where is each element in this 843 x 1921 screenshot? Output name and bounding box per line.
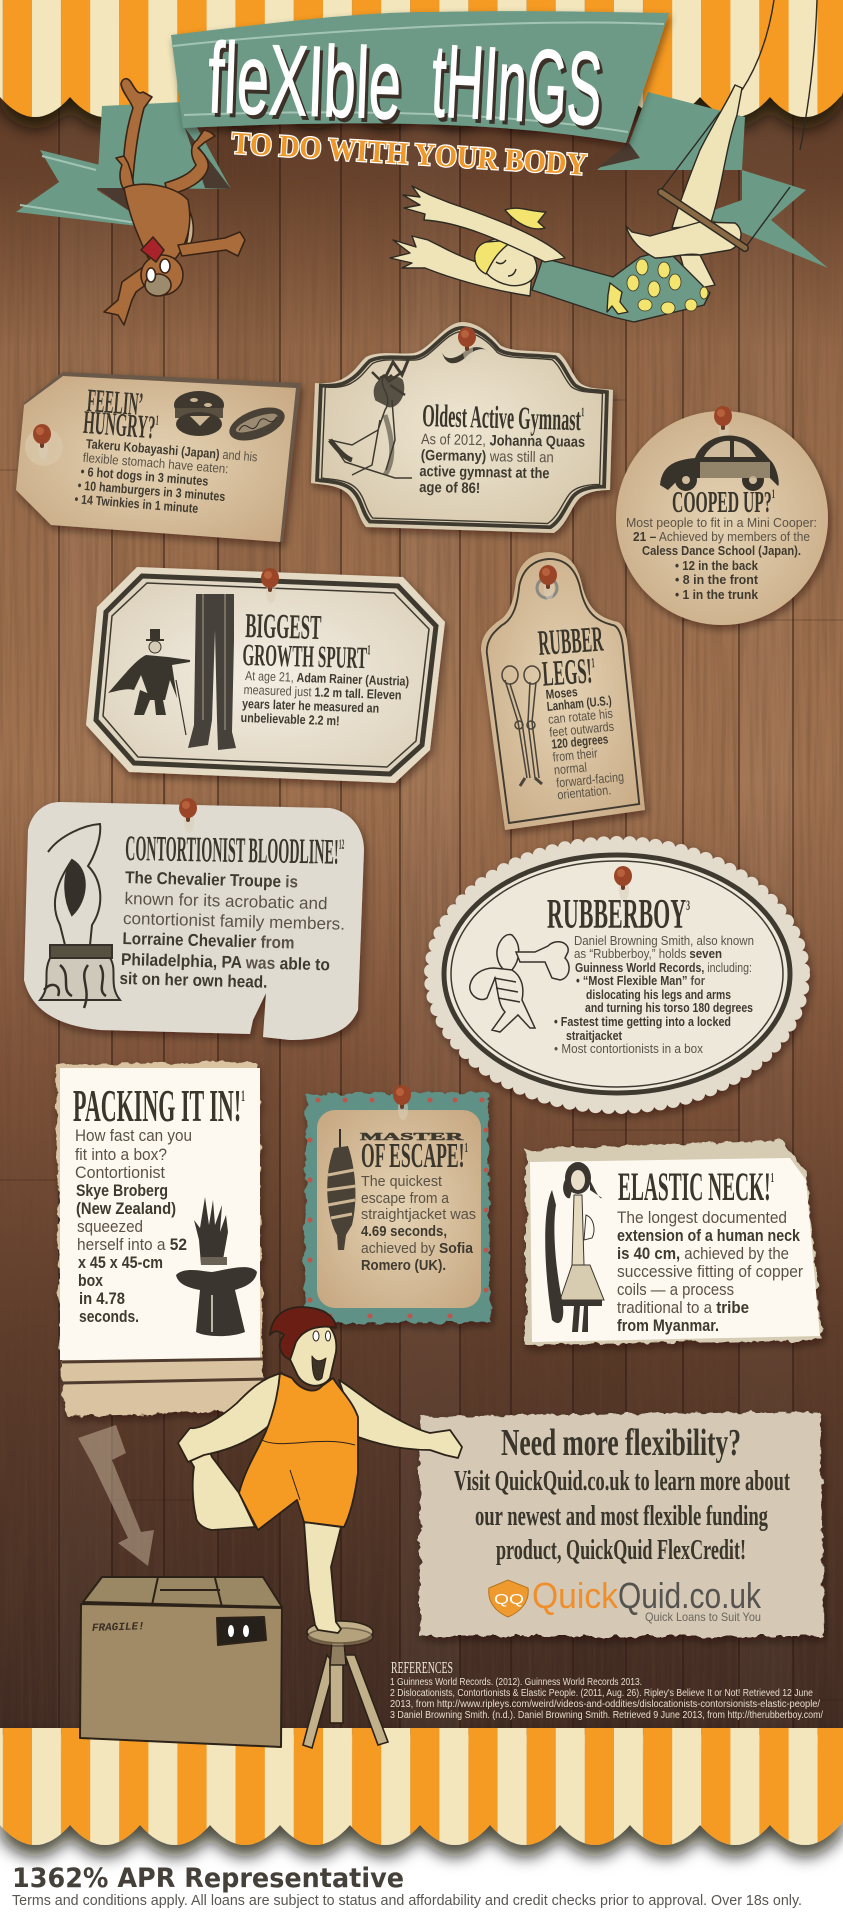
body: escape: The quickest: [361, 1173, 443, 1190]
references: [390, 1658, 823, 1721]
body: cta text: [454, 1465, 790, 1566]
body: contortionist: known for its acrobatic and: [124, 889, 328, 913]
body: hungry: • 6 hot dogs in 3 minutes: [80, 464, 209, 489]
body: growth: [240, 668, 409, 731]
body: contortionist: contortionist family members.: [123, 909, 345, 934]
footer APR heading: 1362% APR Representative: [12, 1863, 404, 1894]
logo: QuickQuid: QQ: [494, 1591, 524, 1608]
illustration: trapeze acrobat: [390, 0, 817, 322]
bottom striped awning: [0, 1728, 843, 1845]
body: packing: x 45 x 45-cm: [78, 1253, 163, 1272]
heading: master of escape: [360, 1131, 468, 1175]
body: gymnast: active gymnast at the: [419, 463, 550, 482]
body: contortionist: [119, 868, 346, 994]
body: packing: in 4.78: [79, 1289, 125, 1308]
heading: feelin' hungry: 1: [155, 414, 159, 429]
body: rubberboy: • Most contortionists in a box: [554, 1041, 703, 1056]
title text: fleXIble: [206, 22, 403, 141]
panel: rubber legs tag: [481, 552, 645, 830]
pin: growth: [261, 568, 279, 603]
panel: feelin' hungry tag: [16, 372, 301, 542]
heading: rubberboy: 3: [686, 898, 690, 914]
pin: gymnast: [458, 327, 476, 362]
heading: growth: [242, 606, 372, 675]
reference list: 1 Guinness World Records. (2012). Guinness World Records 2013.: [390, 1677, 642, 1688]
body: escape: 4.69 seconds,: [361, 1223, 447, 1240]
body: growth: years later he measured an: [242, 696, 379, 716]
pin: rubber legs: [539, 565, 557, 600]
icon: metal ring: [537, 578, 557, 598]
illustration: contortionist statue: [40, 824, 120, 1008]
body: packing: [75, 1126, 192, 1326]
body: escape: [361, 1173, 476, 1274]
body: rubber legs: can rotate his: [547, 706, 614, 727]
body: escape: straightjacket was: [361, 1206, 476, 1223]
heading: rubberboy: RUBBERBOY: [547, 892, 813, 938]
body: packing: herself into a 52: [77, 1235, 187, 1254]
references heading: REFERENCES: [391, 1658, 453, 1677]
body: cooped up: 21 – Achieved by members of the: [633, 529, 810, 544]
illustration: cardboard box: [80, 1577, 282, 1747]
body: elastic neck: extension of a human neck: [617, 1226, 800, 1245]
body: escape: escape from a: [361, 1190, 450, 1207]
heading: growth: GROWTH SPURT: [242, 637, 498, 679]
body: rubber legs: normal: [553, 759, 588, 778]
body: contortionist: sit on her own head.: [119, 969, 268, 992]
illustration: magician hat and hand: [176, 1197, 257, 1336]
reference list: 2013, from http://www.ripleys.com/weird/videos-and-oddities/dislocationists-contorsionists-elastic-people/: [390, 1699, 820, 1710]
heading: gymnast: 1: [581, 404, 585, 419]
body: gymnast: age of 86!: [419, 479, 480, 497]
body: cooped up: • 12 in the back: [675, 558, 759, 573]
ornament: swirl: [442, 347, 488, 363]
body: cooped up: • 8 in the front: [675, 572, 759, 587]
body: gymnast: As of 2012, Johanna Quaas: [421, 431, 585, 451]
body: rubberboy: • “Most Flexible Man” for: [576, 973, 705, 988]
body: contortionist: Philadelphia, PA was able to: [121, 950, 330, 974]
illustration: long-necked woman: [545, 1162, 604, 1332]
body: gymnast: [419, 431, 585, 499]
body: packing: How fast can you: [75, 1126, 192, 1145]
body: elastic neck: is 40 cm, achieved by the: [617, 1244, 789, 1263]
body: escape: Romero (UK).: [361, 1257, 446, 1274]
icon: car: [660, 436, 779, 491]
body: growth: At age 21, Adam Rainer (Austria): [245, 668, 409, 689]
heading: master of escape: 1: [464, 1141, 468, 1156]
illustration: stretching woman: [178, 1307, 462, 1633]
heading: cooped up: 1: [772, 486, 775, 501]
panel: biggest growth spurt: [86, 567, 445, 783]
arrow: translucent double arrow: [78, 1425, 154, 1566]
pin: rubberboy: [614, 866, 632, 901]
pin: escape: [393, 1085, 411, 1120]
illustration: straitjacket figure: [327, 1129, 356, 1250]
body: cooped up: Caless Dance School (Japan).: [642, 543, 801, 558]
body: rubberboy: Guinness World Records, including:: [575, 960, 752, 975]
panel: contortionist bloodline: [24, 798, 364, 1040]
heading: rubber legs: LEGS!: [541, 646, 651, 694]
illustration: stool: [303, 1621, 388, 1748]
panel: cooped up circle: [616, 406, 828, 625]
body: packing: fit into a box?: [75, 1145, 167, 1164]
body: packing: Skye Broberg: [76, 1181, 168, 1200]
panel: rubber legs tag: RUBBER: [537, 619, 605, 663]
panel: packing it in paper: [56, 1062, 266, 1416]
title text: tHInGS: [432, 27, 608, 152]
body: packing: seconds.: [79, 1307, 139, 1326]
heading: rubber legs: 1: [591, 656, 595, 671]
text: fragile label: FRAGILE!: [92, 1621, 145, 1635]
body: rubberboy: Daniel Browning Smith, also known: [574, 933, 754, 948]
body: elastic neck: The longest documented: [617, 1208, 787, 1227]
body: elastic neck: traditional to a tribe: [617, 1298, 749, 1317]
illustration: gymnast sketch: [330, 358, 412, 478]
body: rubberboy: dislocating his legs and arms: [586, 987, 731, 1002]
body: elastic neck: from Myanmar.: [617, 1316, 719, 1335]
pin: contortionist: [179, 798, 197, 833]
body: rubber legs: forward-facing: [555, 769, 625, 790]
body: cooped up: Most people to fit in a Mini Cooper:: [626, 515, 817, 530]
footer terms: Terms and conditions apply. All loans are subject to status and affordability and credit checks prior to approval. Over 18s only.: [12, 1892, 802, 1909]
panel: contortionist bloodline: 12: [339, 838, 344, 853]
body: hungry: [74, 435, 258, 520]
body: gymnast: (Germany) was still an: [421, 447, 554, 466]
pin: hungry: [33, 424, 51, 459]
body: rubberboy: [554, 933, 754, 1056]
body: growth: unbelievable 2.2 m!: [240, 710, 340, 728]
icon: hot dog: [225, 401, 289, 447]
body: cooped up: [626, 515, 817, 602]
body: rubber legs: feet outwards: [549, 719, 615, 740]
body: elastic neck: successive fitting of copper: [617, 1262, 803, 1281]
illustration: monkey: [104, 79, 245, 325]
body: packing: box: [78, 1271, 103, 1290]
panel: master of escape card: [304, 1085, 490, 1324]
body: rubberboy: as “Rubberboy,” holds seven: [574, 946, 722, 961]
body: hungry: • 14 Twinkies in 1 minute: [74, 491, 199, 516]
body: rubberboy: • Fastest time getting into a locked: [554, 1014, 731, 1029]
icon: burger: [174, 391, 224, 436]
body: elastic neck: coils — a process: [617, 1280, 734, 1299]
body: hungry: Takeru Kobayashi (Japan) and his: [85, 436, 258, 465]
body: packing: squeezed: [77, 1217, 143, 1236]
body: contortionist: The Chevalier Troupe is: [125, 868, 298, 892]
body: rubberboy: straitjacket: [566, 1028, 623, 1043]
heading: master of escape: OF ESCAPE!: [361, 1136, 567, 1175]
heading: rubber legs: [537, 619, 607, 694]
body: rubber legs: Lanham (U.S.): [546, 693, 612, 714]
subtitle: TO DO WITH YOUR BODY: [231, 125, 588, 182]
body: packing: (New Zealand): [76, 1199, 176, 1218]
title text: fleXIble: [209, 26, 406, 145]
illustration: giant legs: [188, 594, 236, 750]
body: escape: achieved by Sofia: [361, 1240, 474, 1257]
body: rubberboy: and turning his torso 180 degrees: [585, 1000, 753, 1015]
logo: QuickQuid: [489, 1575, 762, 1624]
body: rubber legs: [545, 680, 626, 803]
body: rubber legs: orientation.: [557, 782, 612, 802]
panel: elastic neck paper: [526, 1140, 822, 1345]
heading: growth: BIGGEST: [245, 606, 322, 647]
body: hungry: flexible stomach have eaten:: [82, 450, 229, 476]
reference list: [390, 1677, 823, 1721]
heading: master of escape: MASTER: [360, 1131, 465, 1143]
panel: feelin' hungry tag: HUNGRY?: [82, 405, 246, 453]
title ribbon: [16, 11, 828, 268]
body: elastic neck: [617, 1208, 803, 1335]
heading: gymnast: Oldest Active Gymnast: [422, 397, 737, 441]
logo: QuickQuid: Quick: [532, 1575, 619, 1616]
panel: packing it in paper: 1: [241, 1088, 245, 1105]
panel: oldest active gymnast plaque: [311, 322, 613, 533]
illustration: rubberboy figure: [470, 935, 569, 1032]
pin: cooped: [714, 406, 732, 441]
body: cooped up: • 1 in the trunk: [675, 587, 759, 602]
panel: rubberboy seal: [431, 843, 803, 1107]
body: contortionist: Lorraine Chevalier from: [122, 929, 295, 952]
body: packing: Contortionist: [75, 1163, 165, 1182]
body: rubber legs: 120 degrees: [551, 731, 609, 752]
box hole with eyes: [217, 1617, 266, 1645]
title text: tHInGS: [429, 23, 605, 148]
tag eyelet: [25, 428, 63, 466]
panel: packing it in paper: PACKING IT IN!: [73, 1080, 424, 1131]
logo: QuickQuid: Quick Loans to Suit You: [645, 1610, 761, 1624]
infographic canvas: CONTORTIONIST BLOODLINE!: [125, 828, 670, 878]
heading: growth: 1: [367, 643, 371, 658]
body: growth: measured just 1.2 m tall. Eleven: [243, 682, 402, 702]
body: rubber legs: from their: [552, 745, 599, 765]
top striped awning: [0, 0, 843, 117]
panel: need more flexibility call to action: [420, 1412, 824, 1636]
body: rubber legs: Moses: [545, 684, 578, 702]
illustration: man with top hat: [108, 629, 190, 735]
heading: feelin' hungry: [82, 383, 161, 447]
illustration: skeleton legs: [502, 666, 542, 786]
logo: QuickQuid: Quid.co.uk: [618, 1575, 762, 1616]
panel: elastic neck paper: 1: [771, 1171, 774, 1186]
heading: feelin' hungry: FEELIN’: [86, 383, 144, 423]
body: hungry: • 10 hamburgers in 3 minutes: [77, 477, 226, 504]
